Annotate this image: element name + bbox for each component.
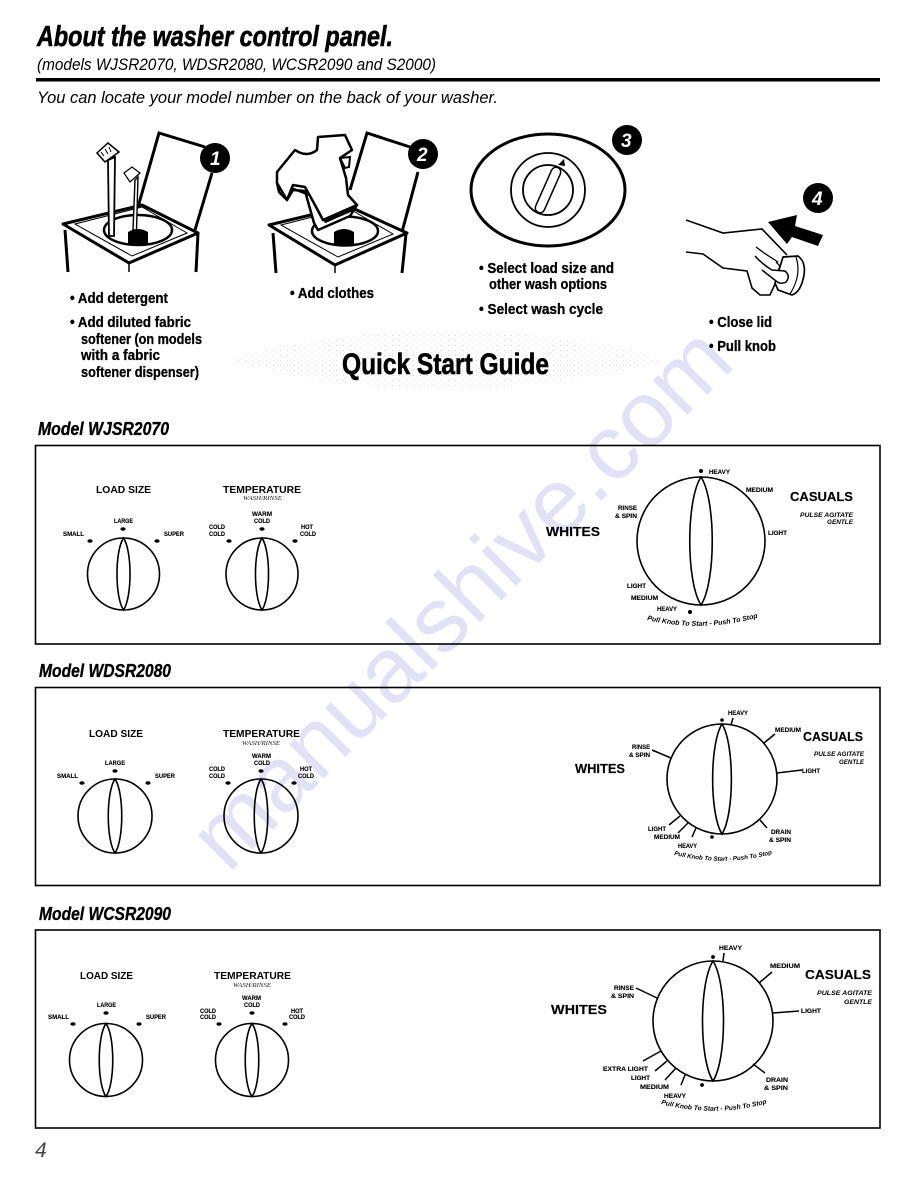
wash cycle dial: CASUALS: [790, 489, 853, 504]
wash cycle dial: CASUALS: [805, 967, 871, 982]
header rule: [36, 78, 880, 82]
wash cycle dial: HEAVY: [728, 710, 749, 717]
wash cycle dial: DRAIN: [771, 829, 791, 836]
text: add detergent: • Add detergent: [70, 291, 168, 307]
wash cycle dial: PULSE AGITATE: [817, 990, 873, 997]
wash cycle dial: EXTRA LIGHT: [603, 1066, 648, 1073]
temperature dial: COLD: [254, 760, 270, 767]
temperature dial: WASH/RINSE: [243, 496, 282, 502]
temperature dial: COLD: [300, 531, 316, 538]
subtitle: models: (models WJSR2070, WDSR2080, WCSR2090 and S2000): [37, 55, 436, 74]
load size dial: SMALL: [63, 531, 84, 538]
temperature dial: COLD: [209, 766, 225, 773]
text: close lid: • Close lid: [709, 315, 772, 331]
load size dial: SUPER: [155, 773, 175, 780]
wash cycle dial: GENTLE: [827, 519, 854, 526]
temperature dial: WARM: [252, 753, 271, 760]
wash cycle dial: & SPIN: [629, 752, 650, 759]
load size dial: [57, 729, 175, 853]
load size dial: SUPER: [164, 531, 184, 538]
temperature dial: WASH/RINSE: [242, 741, 280, 747]
wash cycle dial: RINSE: [618, 505, 638, 512]
icon: control dial: [471, 134, 625, 246]
wash cycle dial: HEAVY: [664, 1093, 687, 1100]
load size dial: SMALL: [57, 773, 78, 780]
wash cycle dial: HEAVY: [657, 606, 678, 613]
wash cycle dial: & SPIN: [764, 1085, 788, 1092]
wash cycle dial: DRAIN: [766, 1077, 788, 1084]
temperature dial: HOT: [301, 524, 313, 531]
wash cycle dial: HEAVY: [709, 469, 731, 476]
wash cycle dial: GENTLE: [844, 999, 873, 1006]
wash cycle dial: Pull Knob To Start - Push To Stop: [674, 851, 772, 861]
step 2: add clothes: [269, 133, 438, 302]
step 3: select options: [471, 125, 642, 318]
heading: model WCSR2090: Model WCSR2090: [39, 904, 171, 924]
wash cycle dial: PULSE AGITATE: [814, 751, 865, 758]
step 4: pull knob: [686, 183, 833, 355]
load size dial: LOAD SIZE: [96, 485, 151, 496]
text: select load size: • Select load size and: [479, 261, 614, 277]
temperature dial: COLD: [200, 1014, 216, 1021]
temperature dial: [209, 485, 316, 610]
quick start guide banner: [229, 332, 664, 388]
wash cycle dial: MEDIUM: [631, 595, 659, 602]
temperature dial: COLD: [289, 1014, 305, 1021]
text: pull knob: • Pull knob: [709, 339, 776, 355]
text: add fabric softener: softener dispenser): [81, 365, 199, 381]
badge 4: 4: [811, 189, 823, 210]
text: select load size: [479, 261, 614, 293]
badge 3: 3: [621, 131, 632, 152]
load size dial: [63, 485, 184, 610]
wash cycle dial: MEDIUM: [775, 727, 801, 734]
watermark: manualshive.com: [170, 307, 751, 888]
temperature dial: [200, 971, 305, 1096]
wash cycle dial: CASUALS: [803, 729, 863, 744]
wash cycle dial: [550, 945, 873, 1111]
wash cycle dial: LIGHT: [768, 530, 787, 537]
load size dial: LOAD SIZE: [89, 729, 143, 740]
wash cycle dial: MEDIUM: [654, 834, 680, 841]
panel: WDSR2080: [34, 686, 881, 886]
text: add clothes: • Add clothes: [290, 286, 374, 302]
text: add fabric softener: softener (on models: [81, 332, 202, 348]
wash cycle dial: MEDIUM: [640, 1084, 670, 1091]
wash cycle dial: HEAVY: [719, 945, 743, 952]
wash cycle dial: LIGHT: [631, 1075, 650, 1082]
load size dial: LARGE: [105, 760, 126, 767]
temperature dial: WASH/RINSE: [233, 983, 271, 989]
temperature dial: COLD: [298, 773, 314, 780]
title: About the washer control panel.: [36, 21, 393, 53]
wash cycle dial: & SPIN: [615, 513, 637, 520]
load size dial: LOAD SIZE: [80, 971, 133, 982]
wash cycle dial: Pull Knob To Start - Push To Stop: [661, 1100, 766, 1111]
wash cycle dial: MEDIUM: [746, 487, 774, 494]
arrow: push direction: [768, 215, 823, 246]
badge 1: 1: [210, 149, 221, 170]
wash cycle dial: Pull Knob To Start - Push To Stop: [647, 614, 758, 626]
step 1: add detergent: [63, 133, 230, 381]
temperature dial: TEMPERATURE: [214, 971, 291, 982]
temperature dial: HOT: [300, 766, 312, 773]
temperature dial: HOT: [291, 1008, 303, 1015]
badge 1: [200, 143, 230, 173]
text: add fabric softener: • Add diluted fabric: [70, 315, 191, 331]
temperature dial: TEMPERATURE: [223, 729, 300, 740]
icon: washer with detergent: [63, 133, 212, 272]
heading: model WDSR2080: Model WDSR2080: [39, 661, 171, 681]
wash cycle dial: LIGHT: [802, 768, 820, 775]
panel: WJSR2070: [34, 444, 881, 645]
wash cycle dial: GENTLE: [839, 759, 865, 766]
temperature dial: COLD: [209, 524, 225, 531]
temperature dial: WARM: [252, 511, 272, 518]
intro text: You can locate your model number on the back of your washer.: [37, 89, 498, 107]
wash cycle dial: RINSE: [614, 985, 635, 992]
wash cycle dial: [546, 469, 854, 626]
panel: WCSR2090: [34, 929, 881, 1129]
wash cycle dial: [575, 710, 865, 861]
temperature dial: COLD: [254, 518, 270, 525]
temperature dial: WARM: [242, 995, 261, 1002]
wash cycle dial: MEDIUM: [770, 963, 801, 970]
load size dial: LARGE: [97, 1002, 116, 1009]
wash cycle dial: HEAVY: [678, 843, 698, 850]
badge 4: [803, 183, 833, 213]
temperature dial: COLD: [200, 1008, 216, 1015]
load size dial: LARGE: [114, 518, 133, 525]
wash cycle dial: LIGHT: [648, 826, 666, 833]
text: add fabric softener: [70, 315, 202, 381]
wash cycle dial: WHITES: [551, 1002, 607, 1017]
wash cycle dial: & SPIN: [611, 993, 634, 1000]
text: select wash cycle: • Select wash cycle: [479, 302, 603, 318]
temperature dial: COLD: [209, 531, 225, 538]
text: select load size: other wash options: [489, 277, 607, 293]
wash cycle dial: WHITES: [546, 524, 600, 539]
wash cycle dial: RINSE: [632, 744, 651, 751]
load size dial: SUPER: [146, 1014, 166, 1021]
wash cycle dial: LIGHT: [801, 1008, 821, 1015]
page number: 4: [35, 1139, 47, 1162]
wash cycle dial: PULSE AGITATE: [800, 512, 854, 519]
wash cycle dial: WHITES: [575, 761, 625, 776]
load size dial: [48, 971, 166, 1096]
wash cycle dial: & SPIN: [769, 837, 791, 844]
load size dial: SMALL: [48, 1014, 69, 1021]
temperature dial: COLD: [209, 773, 225, 780]
temperature dial: TEMPERATURE: [223, 485, 301, 496]
temperature dial: [209, 729, 314, 853]
badge 3: [612, 125, 642, 155]
heading: model WJSR2070: Model WJSR2070: [38, 419, 169, 439]
wash cycle dial: LIGHT: [627, 583, 646, 590]
badge 2: 2: [416, 145, 428, 166]
icon: hand pulling knob: [686, 220, 804, 295]
text: add fabric softener: with a fabric: [80, 348, 160, 364]
icon: washer with clothes: [269, 133, 418, 273]
badge 2: [408, 139, 438, 169]
temperature dial: COLD: [244, 1002, 260, 1009]
quick start guide banner: Quick Start Guide: [342, 348, 549, 381]
